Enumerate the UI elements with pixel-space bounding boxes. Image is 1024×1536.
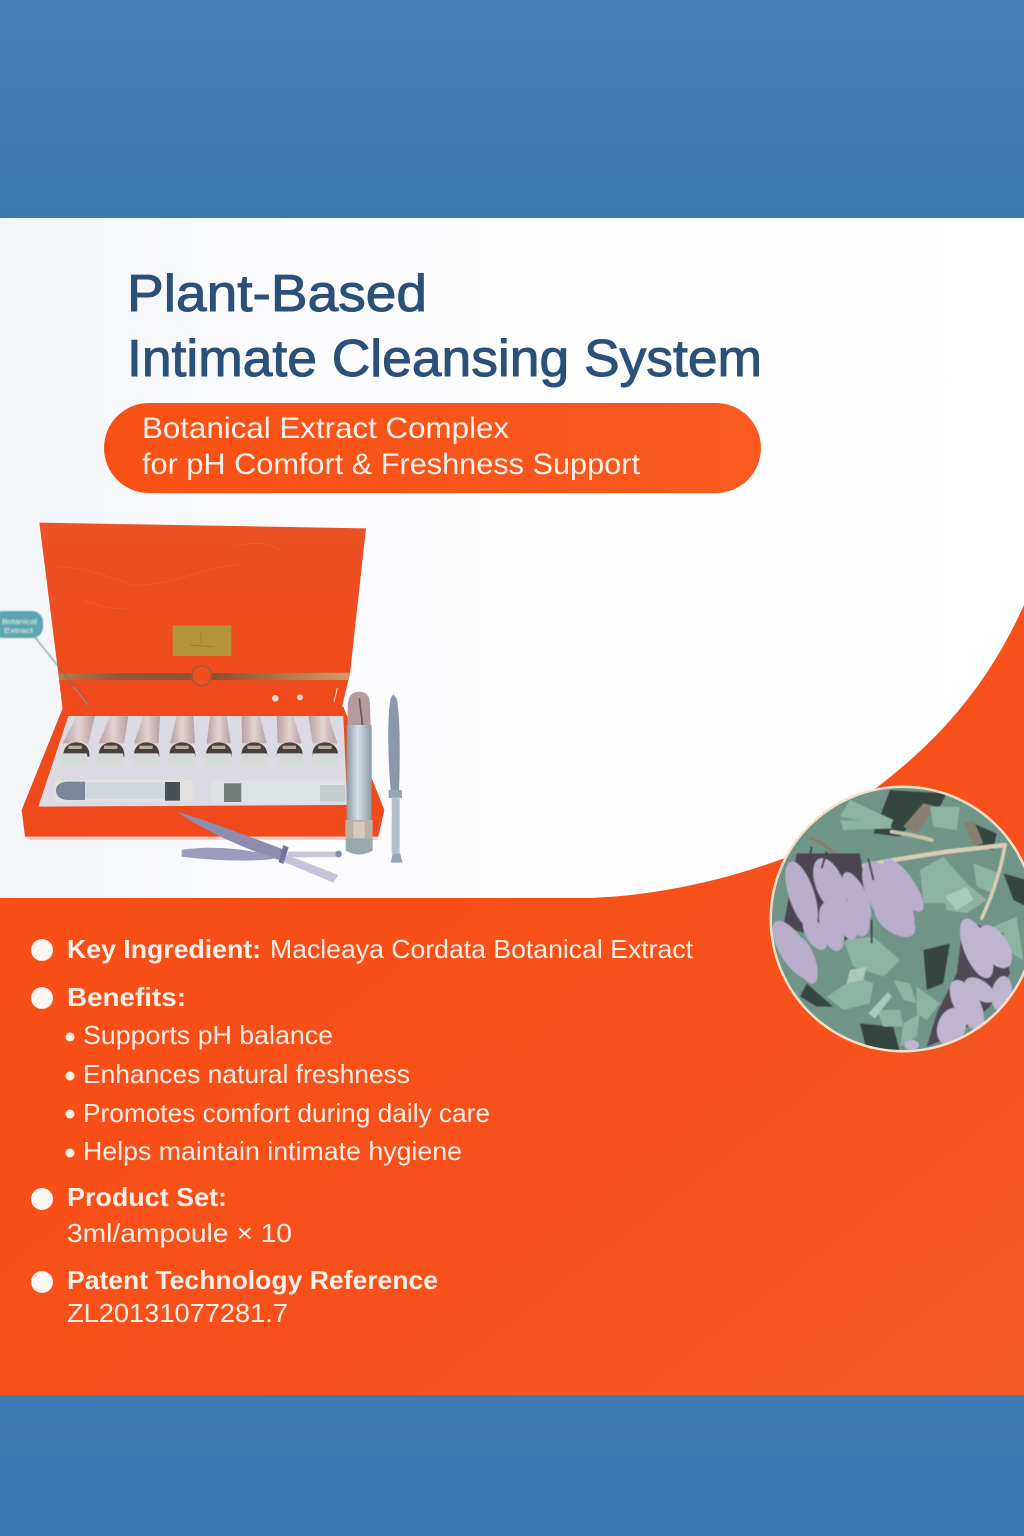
patent item: Patent Technology Reference: [67, 1265, 438, 1295]
benefits item: Helps maintain intimate hygiene: [83, 1136, 462, 1166]
dark foliage: [800, 790, 1024, 1052]
patent item: ZL20131077281.7: [67, 1298, 288, 1328]
subtitle pill: Botanical Extract Complex: [142, 412, 509, 445]
teal callout tag: Extract: [4, 628, 33, 635]
box base: [22, 707, 384, 840]
patent item: [31, 1265, 438, 1328]
title: [127, 265, 762, 388]
product photo: open orange box with ampoules: [22, 523, 403, 883]
product set item: 3ml/ampoule × 10: [67, 1218, 292, 1248]
benefits item: [31, 982, 490, 1166]
benefits item: Promotes comfort during daily care: [83, 1098, 490, 1128]
top blue band: [0, 0, 1024, 219]
standing applicator: [388, 694, 403, 863]
teal callout tag: Botanical: [2, 619, 38, 626]
subtitle pill: for pH Comfort & Freshness Support: [142, 448, 641, 481]
orange swoosh panel: [0, 605, 1024, 1395]
applicator lying: [182, 848, 342, 861]
title: Intimate Cleansing System: [127, 330, 762, 388]
product set item: Product Set:: [67, 1182, 227, 1212]
feature list: [31, 934, 694, 1328]
benefits item: Enhances natural freshness: [83, 1059, 410, 1089]
key ingredient item: Macleaya Cordata Botanical Extract: [270, 934, 694, 964]
ampoules row: [61, 716, 338, 767]
teal callout tag: [0, 611, 90, 706]
applicator crossing: [177, 812, 338, 883]
tube left in tray: [55, 780, 193, 802]
plant photo circle: [764, 785, 1024, 1052]
lilac seed pods right cluster: [904, 914, 1019, 1050]
tan stems: [810, 832, 1005, 918]
green leaves: [827, 800, 1023, 1047]
key ingredient item: Key Ingredient:: [67, 934, 261, 964]
tall vial: [345, 692, 373, 854]
white panel: [0, 218, 1024, 900]
title: Plant-Based: [127, 265, 427, 323]
benefits item: Supports pH balance: [83, 1020, 333, 1050]
product set item: [31, 1182, 292, 1248]
lilac seed pods left cluster: [764, 847, 930, 987]
brown stalks: [903, 803, 983, 847]
benefits item: Benefits:: [67, 982, 186, 1012]
bottom blue band: [0, 1395, 1024, 1536]
box lid: [39, 523, 366, 715]
key ingredient item: [31, 934, 694, 964]
tube right in tray: [211, 781, 345, 803]
subtitle pill: [104, 403, 761, 493]
